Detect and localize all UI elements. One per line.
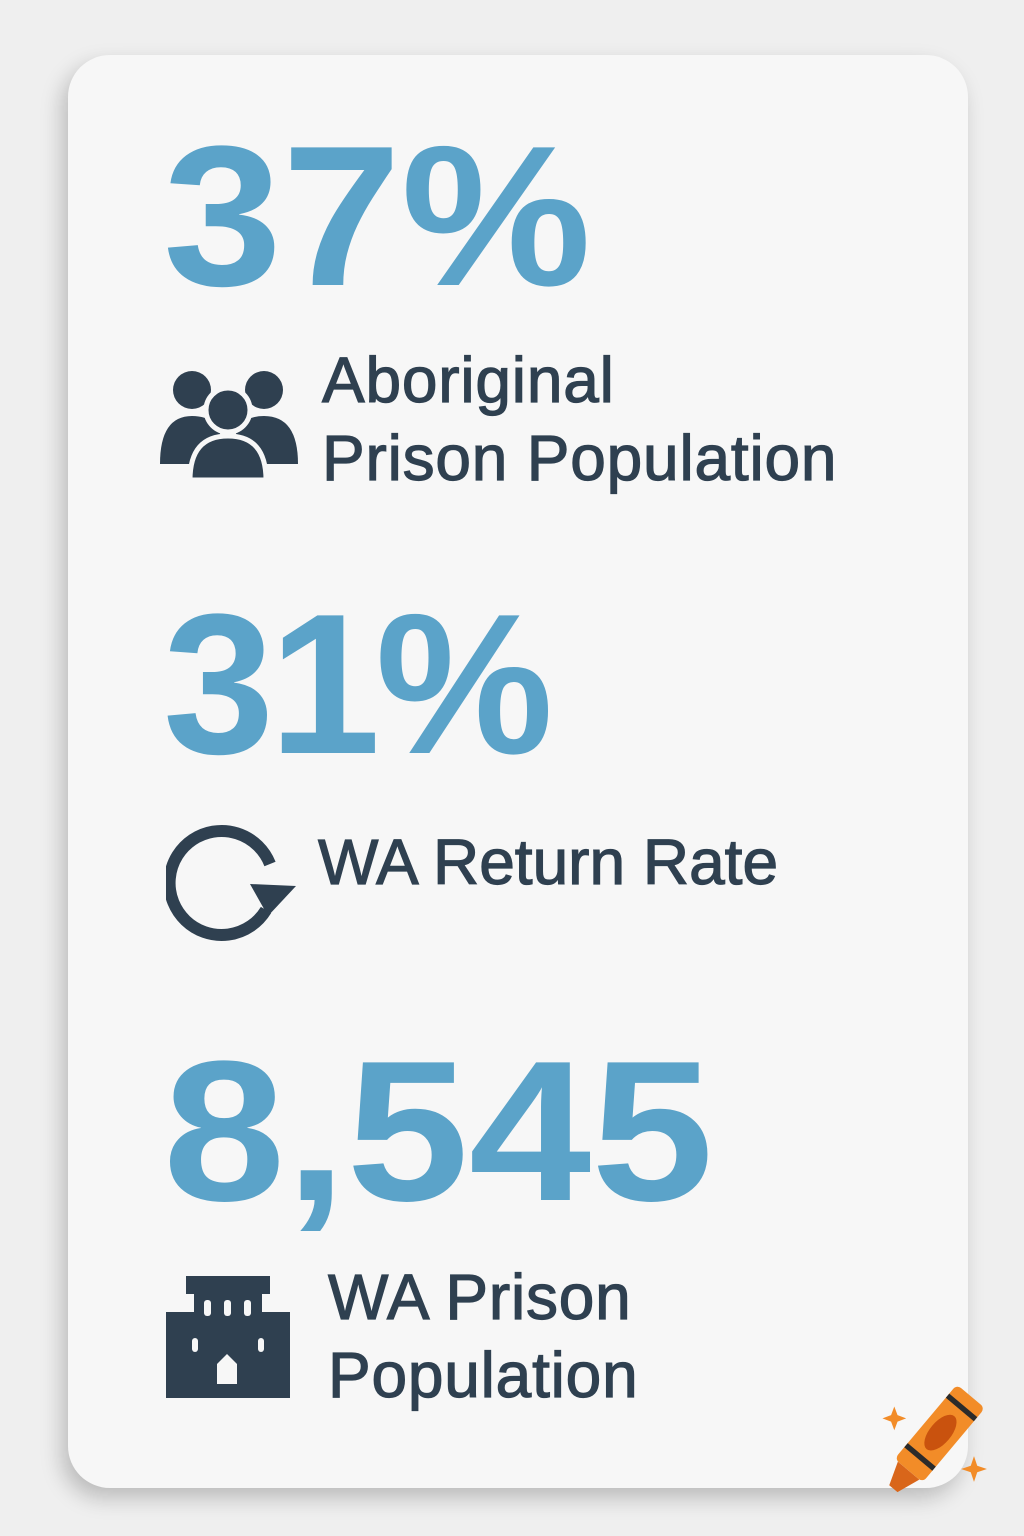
- icon: return arrow: [166, 825, 296, 941]
- label: WA Return Rate: WA Return Rate: [318, 826, 778, 898]
- icon: prison building: [166, 1276, 290, 1398]
- stat number: 37%: 37%: [163, 105, 591, 328]
- stat number: 31%: 31%: [163, 573, 548, 796]
- icon: people: [160, 371, 298, 478]
- label: WA Prison Population: WA Prison: [328, 1261, 632, 1333]
- label: WA Prison Population: [328, 1261, 638, 1412]
- label: Aboriginal Prison Population: [321, 344, 837, 494]
- label: WA Prison Population: Population: [328, 1339, 638, 1411]
- icon: crayon logo: [882, 1386, 987, 1492]
- stat number: 8,545: 8,545: [163, 1020, 714, 1243]
- label: Aboriginal Prison Population: Aboriginal: [322, 344, 615, 416]
- label: Aboriginal Prison Population: Prison Population: [322, 422, 837, 494]
